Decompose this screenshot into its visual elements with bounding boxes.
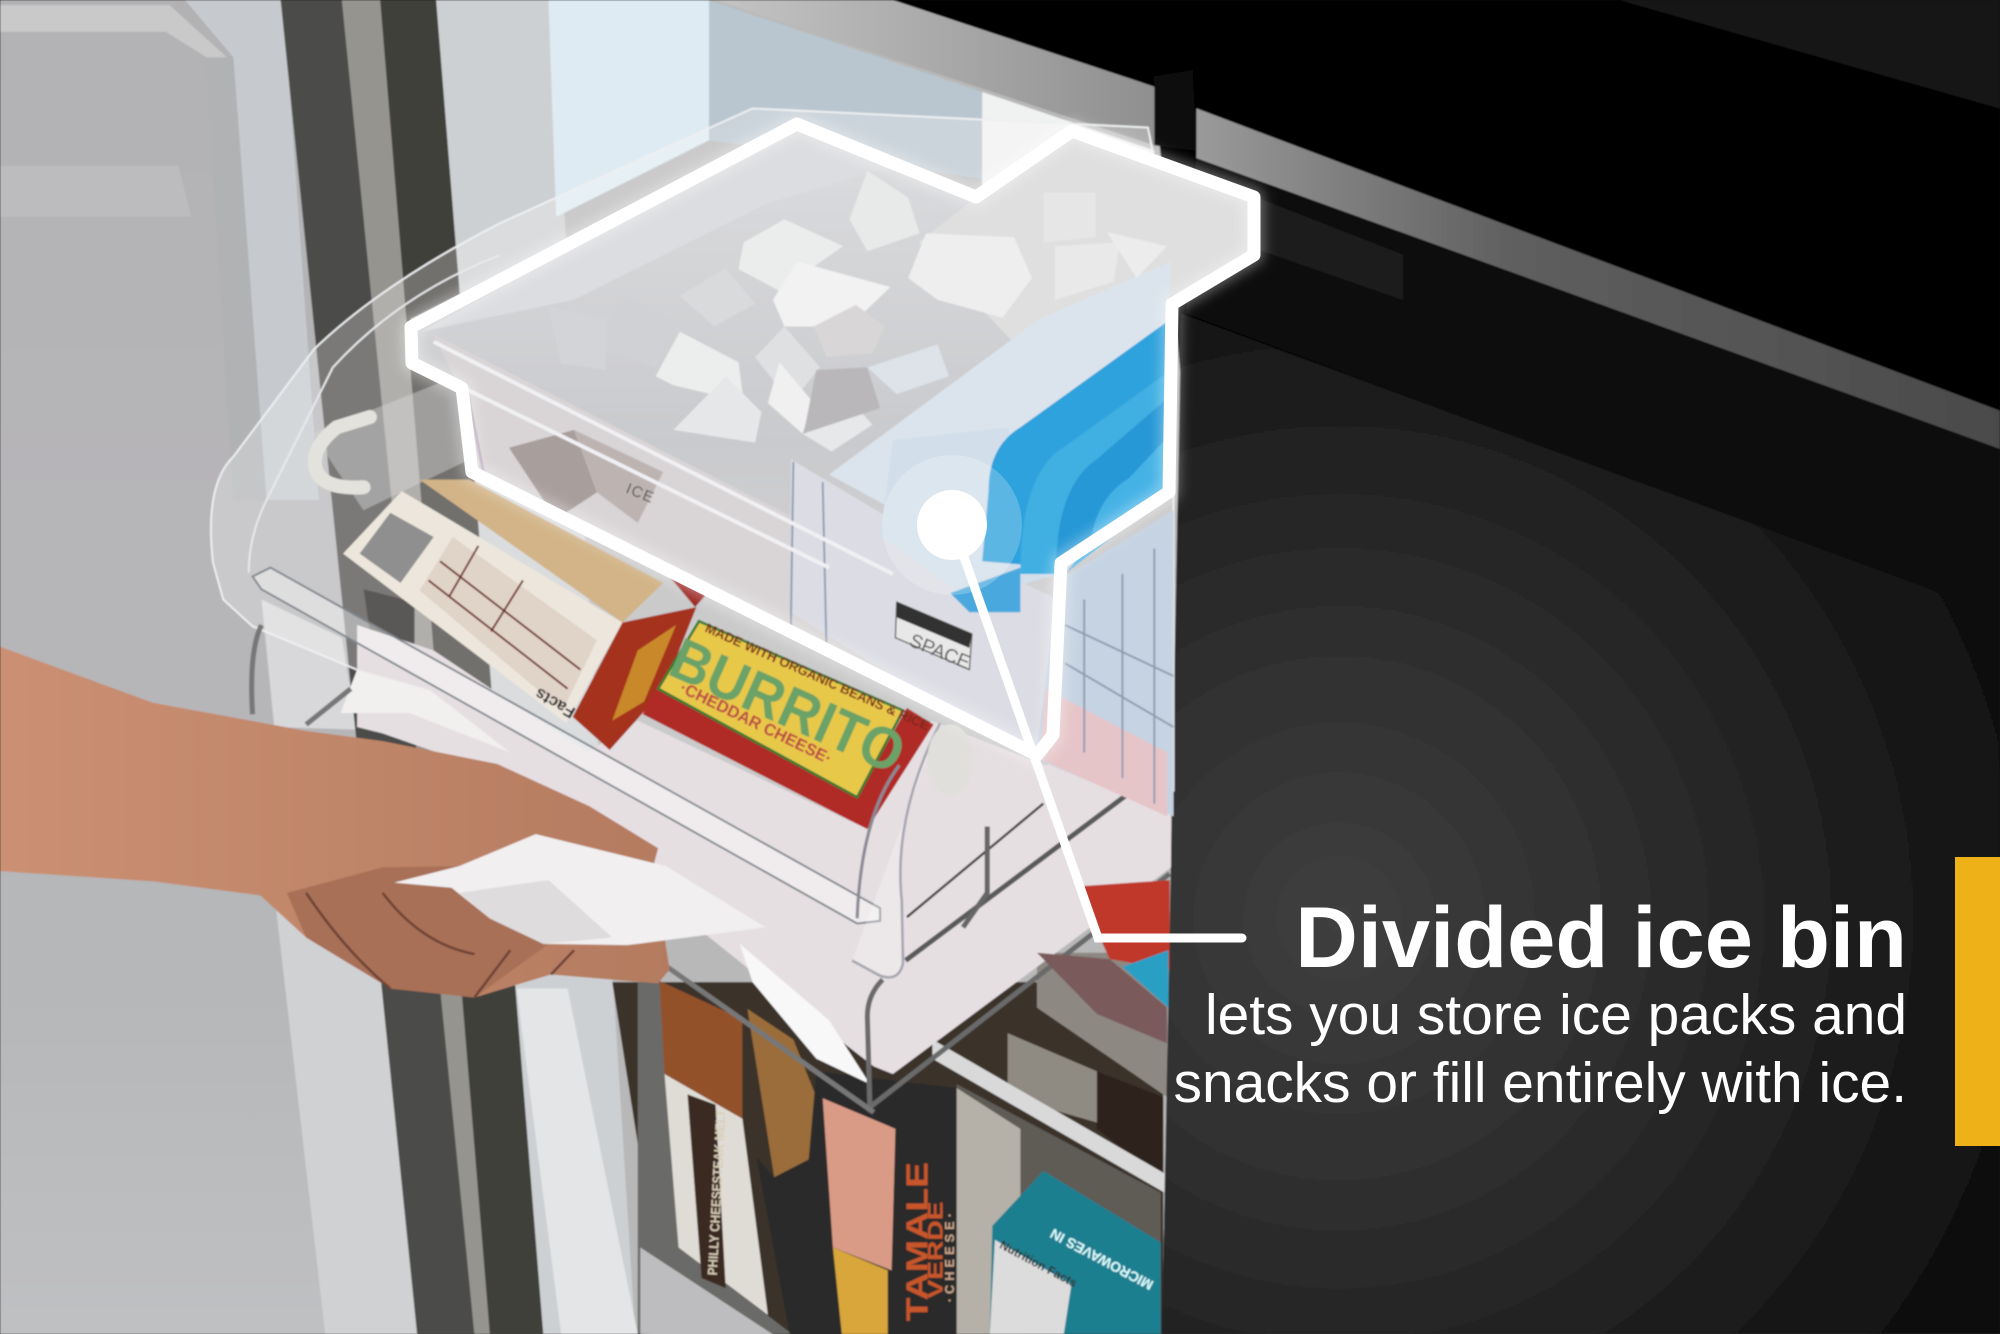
food: burrito package: ·CHEDDAR CHEESE·	[677, 678, 835, 768]
callout description: lets you store ice packs and	[1205, 983, 1907, 1047]
callout description: snacks or fill entirely with ice.	[1174, 1051, 1907, 1115]
bin label: EXTRA SPACE	[895, 602, 973, 674]
food boxes in freezer: PHILLY CHEESESTEAK MELT	[705, 1109, 729, 1276]
food boxes in freezer: MICROWAVES IN	[1047, 1226, 1156, 1293]
food boxes in freezer: Nutrition Facts	[997, 1238, 1080, 1290]
food: wrapped sandwich bag	[343, 480, 713, 750]
hand holding ice pack	[0, 647, 670, 997]
food boxes in freezer: ·CHEESE·	[942, 1213, 957, 1302]
callout leader line	[958, 540, 1242, 938]
freezer lower compartment	[612, 953, 1167, 1334]
wrapped paper under bin	[341, 625, 1171, 1084]
refrigerator right door	[893, 0, 2000, 1334]
food boxes in freezer	[659, 981, 1161, 1334]
food: burrito package: BURRITO	[661, 626, 914, 787]
blue ice packs	[950, 319, 1171, 612]
callout marker dot	[882, 455, 1022, 595]
door edge bands	[281, 0, 638, 1334]
food: wrapped sandwich bag: Facts	[532, 684, 579, 722]
clear shelf drawer	[211, 108, 1173, 969]
open door interior	[0, 0, 421, 1334]
yellow accent bar	[1955, 857, 2000, 1146]
bin outline	[411, 124, 1254, 755]
callout heading: Divided ice bin	[1295, 890, 1907, 986]
clear shelf front edge and wire rack	[252, 568, 1170, 1112]
food: burrito package: MADE WITH ORGANIC BEANS & RICE	[703, 620, 932, 733]
ice bin body	[411, 124, 1256, 816]
ice pack in hand	[394, 834, 765, 945]
food boxes in freezer: TAMALE	[900, 1162, 934, 1321]
bin label: EXTRA SPACE: SPACE	[906, 631, 973, 674]
freezer back wall top	[548, 0, 1154, 217]
callout description	[1174, 983, 1907, 1115]
shelf hinge	[315, 417, 370, 487]
bin label: ICE: ICE	[624, 480, 657, 507]
food boxes in freezer: VERDE	[923, 1202, 948, 1298]
ice cubes	[548, 171, 1167, 452]
